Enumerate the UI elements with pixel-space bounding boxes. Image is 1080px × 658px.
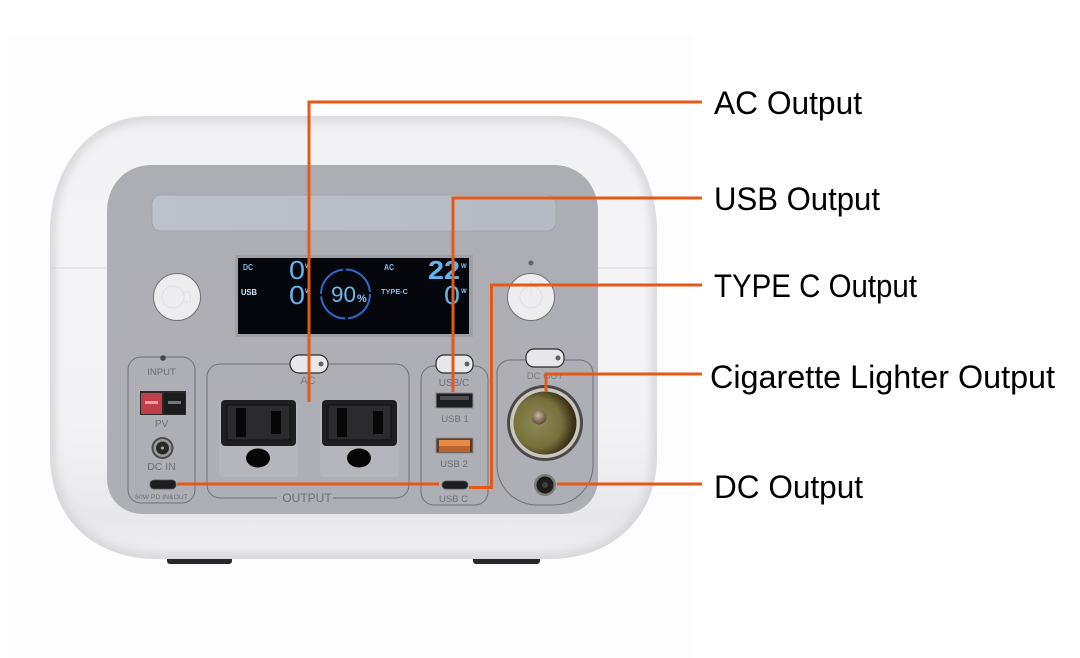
LCD display [235,255,473,337]
leader line: Cigarette Lighter Output [546,374,702,392]
label: Cigarette Lighter Output: Cigarette Lighter Output [710,359,1055,395]
input section: INPUT [147,367,176,378]
battery ring [321,270,370,318]
AC output section [207,355,409,505]
AC output section: AC [300,375,316,387]
input section: DC IN [147,461,176,473]
cigarette lighter socket [507,385,583,461]
input section: 60W PD IN&OUT [135,494,188,501]
LCD labels: AC [384,262,394,272]
LCD values: 0 [289,280,305,310]
leader line: DC Output [557,482,702,486]
LCD labels: TYPE-C [381,287,409,296]
USB output section: USB/C [439,378,469,389]
USB C port [442,481,468,489]
LCD display: W [305,264,311,270]
input section [128,355,195,503]
AC button [290,355,328,373]
leader line: AC Output [309,102,702,402]
LCD labels: USB [241,287,257,297]
LCD labels [241,262,409,297]
label: DC Output: DC Output [714,469,863,505]
LCD display: W [461,289,467,295]
battery percentage: 90 [331,282,356,307]
USB-C input port [150,480,176,489]
USB 2 port [436,438,473,453]
DC output section [497,349,593,505]
LCD labels: DC [243,262,253,272]
LCD display: W [305,289,311,295]
leader line: USB Output [453,198,702,392]
LCD values [289,255,460,310]
power button [508,260,554,320]
device: power station [50,116,657,564]
USB output section: USB 1 [441,414,469,425]
label: TYPE C Output: TYPE C Output [714,268,917,304]
light bar [152,195,556,231]
lamp button [154,274,200,320]
USB 1 port [436,393,473,408]
LCD values: 0 [444,280,460,310]
white housing [50,116,657,559]
input section: PV [155,419,168,430]
AC socket 1 [219,400,298,477]
DC button [526,349,564,367]
leader line: TYPE C Output [177,285,702,488]
infographic: power station output diagram [50,91,1055,564]
LCD display: W [461,264,467,270]
USB button [436,355,473,373]
AC socket 2 [320,400,399,477]
DC in port [152,437,174,459]
DC output port [534,474,556,496]
DC output section: DC OUT [527,371,563,382]
label: USB Output: USB Output [714,181,880,217]
LCD values: 0 [289,255,305,285]
label: AC Output: AC Output [714,85,862,121]
feet [167,556,540,564]
USB output section: USB C [439,494,468,505]
LCD values: 22 [428,255,460,285]
USB output section [421,355,488,505]
AC output section: OUTPUT [282,491,332,505]
LCD display: % [357,293,367,305]
USB output section: USB 2 [440,459,468,470]
gray front panel [107,165,598,514]
PV connector [140,391,186,415]
